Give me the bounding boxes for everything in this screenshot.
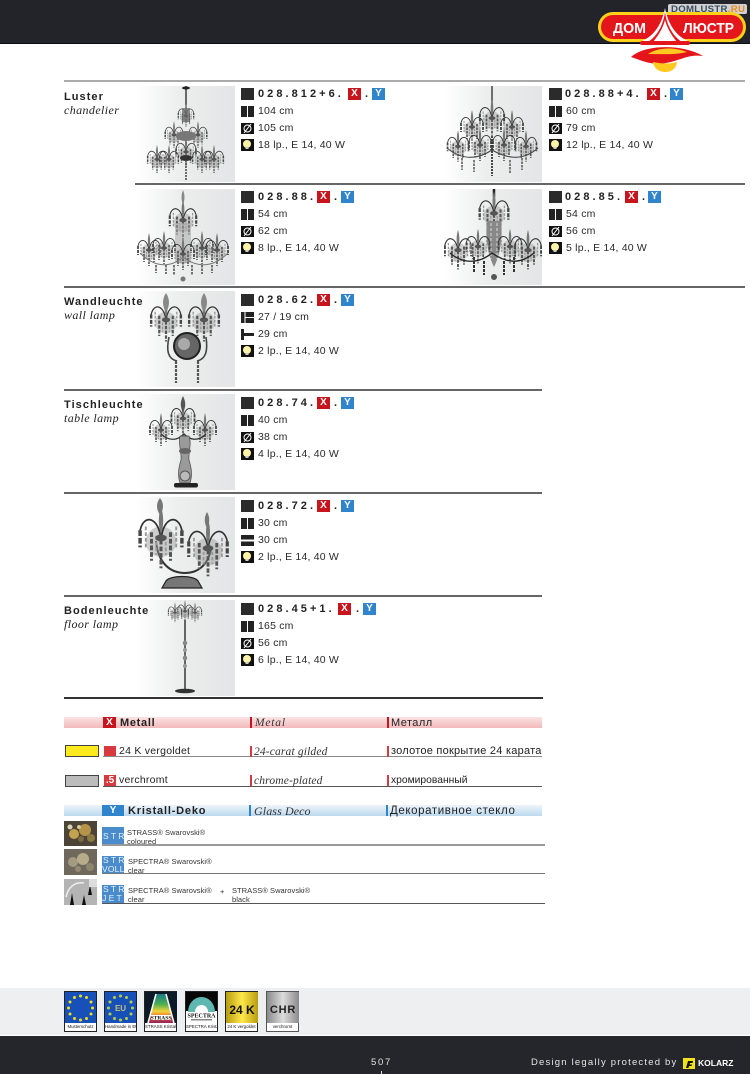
diameter: 38 cm (258, 431, 288, 443)
photo: table lamp 028.74 (136, 394, 235, 490)
projection: 29 cm (258, 328, 288, 340)
badge: 24 K gilded: 24 K (229, 1003, 255, 1017)
logo pill (598, 12, 746, 42)
lamps: 4 lp., E 14, 40 W (258, 448, 339, 460)
article number: X (320, 500, 327, 511)
article number: Y (651, 191, 658, 202)
STR VOLL code (102, 856, 124, 874)
crystal name: STRASS® Swarovski® (127, 828, 205, 837)
logo: Dom Lustr (598, 4, 747, 72)
article number: X (320, 191, 327, 202)
diameter (549, 122, 596, 134)
article number (241, 500, 354, 512)
article number: . (334, 191, 340, 203)
article number (549, 88, 683, 100)
page number: 507 (371, 1057, 392, 1068)
height: 104 cm (258, 105, 294, 117)
crystal name: coloured (127, 837, 156, 846)
logo website label: DOMLUSTR.RU (671, 4, 745, 15)
badge: Strass Kristall (144, 991, 177, 1032)
top divider (64, 80, 745, 82)
legend row: chrome-plated (64, 773, 542, 787)
height: 54 cm (258, 208, 288, 220)
article number (549, 191, 661, 203)
X badge (103, 717, 116, 728)
logo lamp emblem (631, 8, 703, 72)
Russian label: Металл (391, 717, 433, 729)
German label: Kristall-Deko (128, 805, 206, 817)
legend row: 24 K gilded (64, 744, 542, 758)
badge: 24 K gilded (225, 991, 258, 1032)
finish code square: .5 (106, 775, 114, 786)
badge: Strass Kristall: STRASS (151, 1016, 171, 1022)
badge: chrome (266, 991, 299, 1032)
article number: Y (344, 294, 351, 305)
photo: chandelier 028.88 (136, 189, 235, 285)
photo: table lamp 028.72 (136, 497, 235, 593)
crystal name: clear (128, 866, 145, 875)
article number: . (664, 88, 670, 100)
STR JET code (102, 885, 124, 903)
article number: Y (673, 88, 680, 99)
German finish: 24 K vergoldet (119, 745, 190, 757)
photo: chandelier 028.85 (444, 189, 542, 285)
category heading: Tischleuchte: table lamp (64, 411, 119, 425)
height (241, 620, 341, 632)
copyright note: Design legally protected by (531, 1057, 677, 1068)
article number: X (320, 294, 327, 305)
projection (241, 328, 288, 340)
photo: wall lamp 028.62 (136, 291, 235, 387)
legend heading: Metall (64, 717, 542, 728)
Russian label: Декоративное стекло (390, 805, 516, 817)
top header bar (0, 0, 750, 44)
lamps: 2 lp., E 14, 40 W (258, 345, 339, 357)
crystal name: Spectra: clear (128, 895, 145, 904)
specs: 028.812+6 (241, 88, 385, 151)
article number: X (650, 88, 657, 99)
article number (241, 88, 385, 100)
crystal name: Spectra: SPECTRA® Swarovski® (128, 886, 212, 895)
diameter: 79 cm (566, 122, 596, 134)
category heading: Wandleuchte: wall lamp (64, 308, 115, 322)
article number: Y (344, 500, 351, 511)
category heading: Luster (64, 91, 119, 117)
German finish: verchromt (119, 774, 168, 786)
photo: floor lamp 028.45+1 (136, 600, 235, 696)
article number: . (642, 191, 648, 203)
article number: 028.62. (258, 294, 316, 306)
Russian finish: золотое покрытие 24 карата (391, 745, 542, 757)
STR JET code: JET (102, 893, 124, 903)
logo pill: ДОМ (613, 20, 646, 37)
category heading: Wandleuchte (64, 296, 144, 322)
category heading: Bodenleuchte: Bodenleuchte (64, 605, 149, 617)
badge: Musterschutz: Musterschutz (67, 1024, 94, 1029)
lamps: 12 lp., E 14, 40 W (566, 139, 653, 151)
finish code square (104, 746, 116, 757)
diameter: 56 cm (566, 225, 596, 237)
width (241, 534, 288, 546)
article number: X (628, 191, 635, 202)
badge: Spectra Kristall (185, 991, 218, 1032)
specs: 028.72 (241, 500, 354, 563)
crystal photo (64, 849, 97, 875)
plus sign: + (220, 887, 224, 896)
height: 40 cm (258, 414, 288, 426)
crystal row: Strass coloured (64, 821, 545, 846)
category heading: Tischleuchte: Tischleuchte (64, 399, 144, 411)
specs: 028.62 (241, 294, 354, 357)
Y badge: Y (110, 805, 116, 816)
photo: chandelier 028.812+6 (136, 86, 235, 182)
article number: X (341, 603, 348, 614)
footer bar (0, 1036, 750, 1074)
article number (241, 602, 376, 615)
article number: Y (375, 88, 382, 99)
height (241, 414, 288, 426)
article number (241, 294, 354, 306)
crystal photo (64, 821, 97, 846)
footer certification band (0, 988, 750, 1035)
lamps: 8 lp., E 14, 40 W (258, 242, 339, 254)
crystal name (127, 828, 205, 846)
STR code (102, 827, 124, 845)
height: 30 cm (258, 517, 288, 529)
category heading: Wandleuchte: Wandleuchte (64, 296, 144, 308)
height (241, 517, 288, 529)
lamps: 2 lp., E 14, 40 W (258, 551, 339, 563)
article number: Y (344, 191, 351, 202)
badge: Handmade in EU: EU (115, 1004, 126, 1013)
diameter: 105 cm (258, 122, 294, 134)
diameter (549, 225, 596, 237)
photo: chandelier 028.88+4 (444, 86, 542, 182)
article number: 028.88+4. (565, 88, 642, 100)
crystal name: Spectra (128, 886, 212, 904)
article number (241, 191, 354, 203)
Kolarz logo: KOLARZ (698, 1058, 733, 1068)
badge: Handmade in EU (104, 991, 137, 1032)
width: 30 cm (258, 534, 288, 546)
specs: 028.88 (241, 191, 354, 254)
diameter (241, 122, 294, 134)
diameter: 56 cm (258, 637, 288, 649)
article number: . (334, 397, 340, 409)
category heading: Bodenleuchte (64, 605, 149, 631)
crystal name: SPECTRA® Swarovski® (128, 857, 212, 866)
article number: 028.812+6. (258, 88, 344, 100)
crystal name: Strass: black (232, 895, 250, 904)
colour swatch: gold (65, 745, 99, 757)
article number: 028.88. (258, 191, 316, 203)
German label: Metall (120, 717, 155, 729)
Russian finish: хромированный (391, 775, 468, 786)
English finish: 24-carat gilded (254, 746, 327, 758)
badge: chrome: verchromt (273, 1024, 292, 1029)
article number: 028.72. (258, 500, 316, 512)
crystal name: Strass: STRASS® Swarovski® (232, 886, 310, 895)
badge: 24 K gilded: 24 K vergoldet (227, 1024, 256, 1029)
article number: 028.85. (565, 191, 623, 203)
category heading: Luster: chandelier (64, 103, 119, 117)
English label: Glass Deco (254, 804, 311, 818)
legend heading: Kristall-Deko (64, 805, 542, 816)
logo pill: ЛЮСТР (683, 20, 734, 37)
height: 165 cm (258, 620, 294, 632)
category heading: Tischleuchte (64, 399, 144, 425)
article number: 028.74. (258, 397, 316, 409)
STR VOLL code: VOLL (102, 864, 124, 874)
Y badge (102, 805, 124, 816)
finish code square (104, 775, 116, 786)
height (241, 208, 288, 220)
lamps: 5 lp., E 14, 40 W (566, 242, 647, 254)
specs: 028.74 (241, 397, 354, 460)
diameter (241, 431, 288, 443)
article number: Y (366, 603, 373, 614)
English finish: chrome-plated (254, 775, 323, 787)
lamps: 6 lp., E 14, 40 W (258, 654, 339, 666)
specs: 028.85 (549, 191, 661, 254)
English label: Metal (255, 717, 286, 729)
height: 54 cm (566, 208, 596, 220)
X badge: X (106, 717, 113, 728)
specs: 028.88+4 (549, 88, 683, 151)
colour swatch: chrome (65, 775, 99, 787)
article number: X (320, 397, 327, 408)
badge: Musterschutz (64, 991, 97, 1032)
article number: 028.45+1. (258, 603, 335, 615)
height / projection: 27 / 19 cm (258, 311, 309, 323)
crystal name: Strass (232, 886, 310, 904)
category heading: Bodenleuchte: floor lamp (64, 617, 118, 631)
category heading: Luster: Luster (64, 91, 104, 103)
specs: 028.45+1 (241, 602, 376, 666)
article number (241, 397, 354, 409)
crystal photo (64, 879, 97, 905)
height (549, 105, 596, 117)
article number: . (334, 500, 340, 512)
article number: Y (344, 397, 351, 408)
height (241, 105, 294, 117)
height: 60 cm (566, 105, 596, 117)
crystal name (128, 857, 212, 875)
lamps: 18 lp., E 14, 40 W (258, 139, 345, 151)
Kolarz logo (683, 1057, 733, 1069)
article number: X (351, 88, 358, 99)
badge: Spectra Kristall: SPECTRA (187, 1014, 216, 1020)
crystal row: Spectra + Strass black (64, 879, 545, 905)
article number: . (356, 603, 362, 615)
article number: . (334, 294, 340, 306)
diameter (241, 637, 341, 649)
diameter: 62 cm (258, 225, 288, 237)
crystal row: Spectra clear (64, 849, 545, 875)
article number: . (365, 88, 371, 100)
height (549, 208, 596, 220)
badge: chrome: CHR (270, 1004, 296, 1016)
diameter (241, 225, 288, 237)
